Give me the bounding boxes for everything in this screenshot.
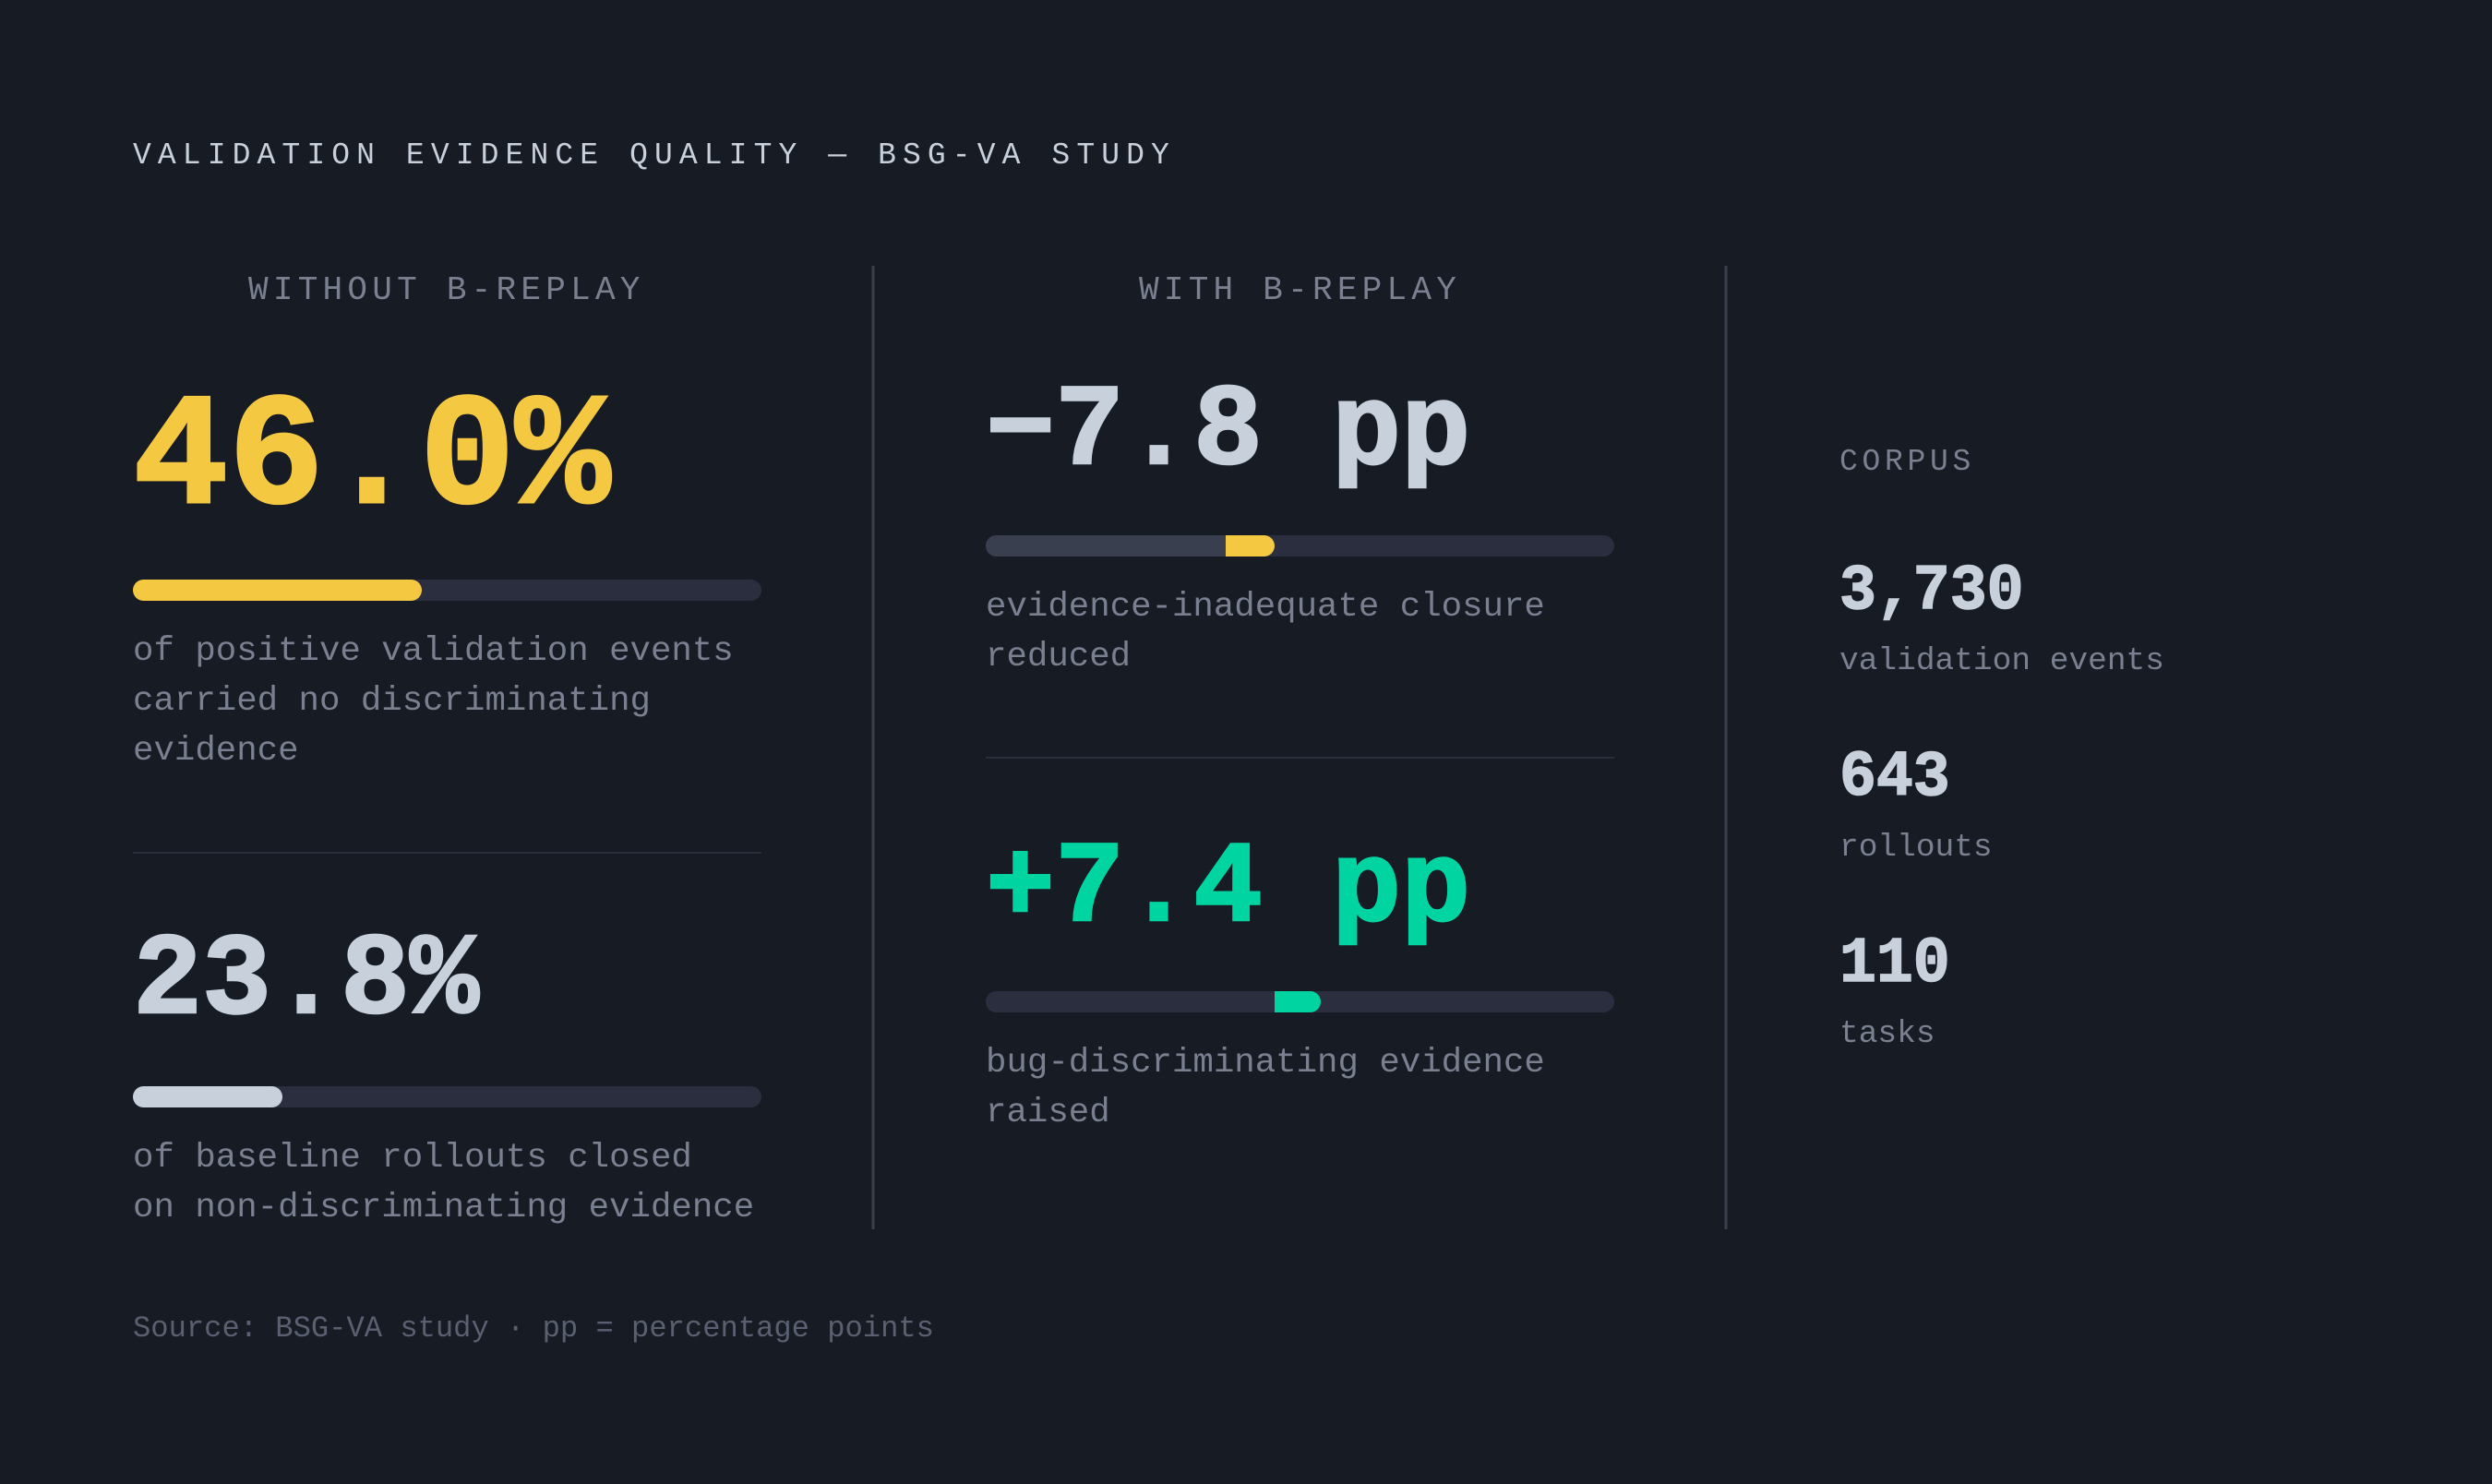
description: evidence-inadequate closure bbox=[986, 588, 1545, 676]
big stat: +7.4 pp: +7.4 pp bbox=[986, 824, 1470, 955]
description: positive validation events: of positive validation events bbox=[133, 632, 734, 671]
description: baseline rollouts: on non-discriminating evidence bbox=[133, 1189, 754, 1227]
description: evidence-inadequate closure: evidence-inadequate closure bbox=[986, 588, 1545, 627]
delta bar: +7.4 pp bbox=[986, 991, 1614, 1012]
description: positive validation events: evidence bbox=[133, 732, 299, 771]
stat: 643 rollouts bbox=[1839, 743, 1993, 866]
stat: 3,730 validation events bbox=[1839, 556, 2164, 679]
stat: 3,730 validation events: validation events bbox=[1839, 643, 2164, 679]
description: baseline rollouts: of baseline rollouts closed bbox=[133, 1139, 692, 1178]
description: positive validation events bbox=[133, 632, 734, 771]
column heading: with b-replay: WITH B-REPLAY bbox=[1139, 271, 1461, 309]
delta bar: -7.8 pp bbox=[986, 535, 1614, 556]
stat: 110 tasks: tasks bbox=[1839, 1016, 1935, 1052]
description: bug-discriminating evidence: raised bbox=[986, 1094, 1110, 1132]
description: baseline rollouts bbox=[133, 1139, 754, 1227]
source note: Source: BSG-VA study · pp = percentage points bbox=[133, 1311, 934, 1346]
big stat: -7.8 pp: −7.8 pp bbox=[986, 367, 1470, 498]
title: VALIDATION EVIDENCE QUALITY — BSG-VA STUDY bbox=[133, 138, 1176, 173]
progress bar: 46.0% bbox=[133, 580, 761, 601]
big stat: 23.8%: 23.8% bbox=[133, 916, 480, 1047]
stat: 110 tasks bbox=[1839, 929, 1950, 1052]
stat: 3,730 validation events: 3,730 bbox=[1839, 556, 2024, 628]
stat: 643 rollouts: 643 bbox=[1839, 743, 1950, 814]
description: bug-discriminating evidence: bug-discriminating evidence bbox=[986, 1044, 1545, 1083]
progress bar: 23.8% bbox=[133, 1086, 761, 1107]
panel: with b-replay bbox=[986, 271, 1614, 1132]
description: evidence-inadequate closure: reduced bbox=[986, 638, 1131, 676]
panel: without b-replay bbox=[133, 271, 761, 1227]
big stat: 46.0%: 46.0% bbox=[133, 369, 611, 550]
panel: corpus bbox=[1839, 445, 2164, 1052]
corpus heading: CORPUS bbox=[1839, 445, 1975, 479]
stat: 643 rollouts: rollouts bbox=[1839, 830, 1993, 866]
description: positive validation events: carried no discriminating bbox=[133, 682, 651, 721]
description: bug-discriminating evidence bbox=[986, 1044, 1545, 1132]
stat: 110 tasks: 110 bbox=[1839, 929, 1950, 1000]
column heading: without b-replay: WITHOUT B-REPLAY bbox=[248, 271, 645, 309]
